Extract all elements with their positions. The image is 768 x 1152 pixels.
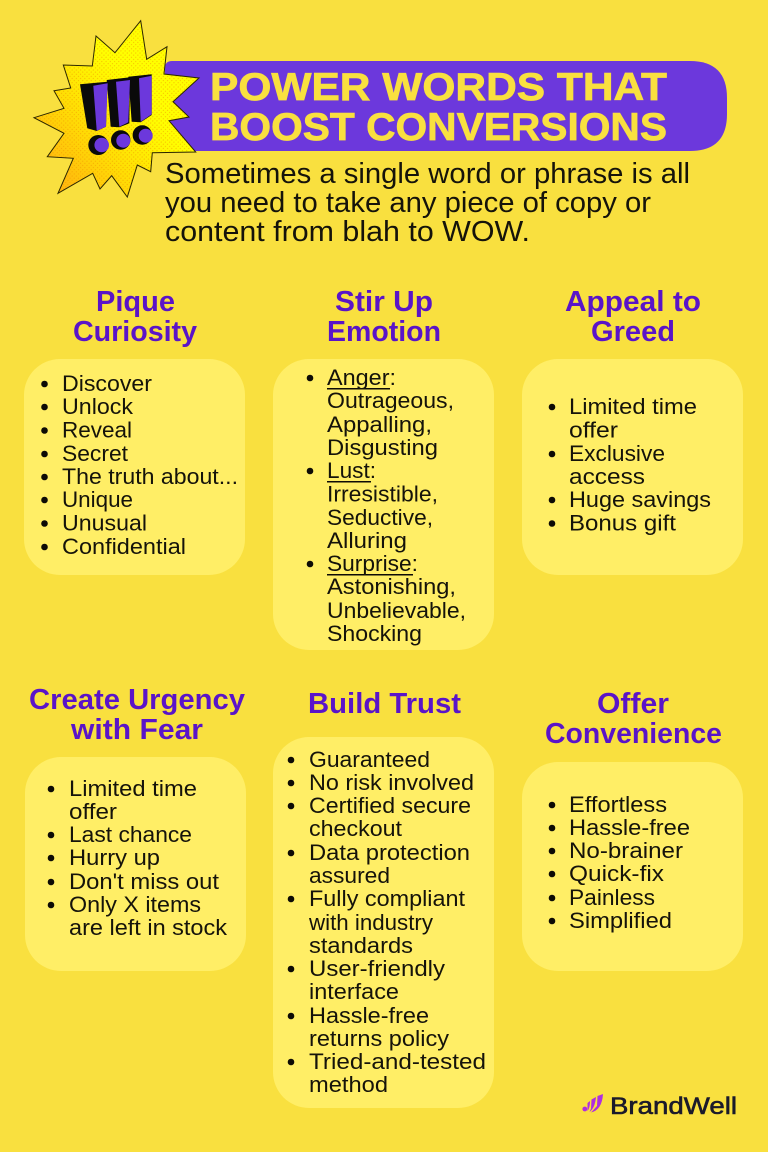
heading: Stir Up Emotion: Emotion: [327, 316, 441, 348]
heading: Offer Convenience: [545, 688, 722, 750]
bullet list: Discover: [62, 371, 153, 396]
bullet list: [41, 371, 238, 559]
intro text: [165, 158, 690, 248]
card background: [273, 359, 494, 650]
bullet list: Lust:: [327, 458, 376, 483]
bullet list: [307, 365, 466, 646]
bullet list: Guaranteed: [309, 747, 430, 772]
heading: Stir Up Emotion: Stir Up: [335, 286, 433, 318]
bullet list: checkout: [309, 816, 403, 841]
card background: [522, 762, 743, 971]
bullet list: Unusual: [62, 510, 147, 536]
bullet list: are left in stock: [69, 915, 228, 940]
title: BOOST CONVERSIONS: [210, 106, 667, 149]
heading: Create Urgency with Fear: Create Urgency: [29, 684, 245, 716]
bullet list: Hurry up: [69, 845, 160, 870]
bullet list: standards: [309, 933, 413, 958]
heading: Pique Curiosity: Pique: [96, 286, 175, 318]
bullet list: Reveal: [62, 418, 132, 442]
bullet list: offer: [69, 799, 118, 824]
intro text: Sometimes a single word or phrase is all: [165, 158, 690, 190]
heading: Pique Curiosity: [73, 286, 197, 348]
intro text: content from blah to WOW.: [165, 216, 530, 248]
panel: Stir Up Emotion: [273, 286, 494, 650]
bullet list: Seductive,: [327, 505, 433, 530]
heading: Stir Up Emotion: [327, 286, 441, 348]
heading: Offer Convenience: Convenience: [545, 718, 722, 750]
title banner: [165, 61, 727, 151]
bullet list: [48, 776, 228, 940]
bullet list: Confidential: [62, 534, 186, 559]
bullet list: User-friendly: [309, 956, 446, 981]
bullet list: returns policy: [309, 1026, 450, 1051]
panel: Appeal to Greed: [522, 286, 743, 575]
title: POWER WORDS THAT: [210, 66, 668, 109]
bullet list: Surprise:: [327, 551, 418, 576]
bullet list: Shocking: [327, 621, 422, 646]
bullet list: Hassle-free: [309, 1003, 429, 1028]
bullet list: Astonishing,: [327, 574, 456, 599]
bullet list: Only X items: [69, 892, 201, 917]
bullet list: access: [569, 464, 645, 489]
bullet list: Huge savings: [569, 487, 711, 512]
panel: Create Urgency with Fear: [25, 684, 246, 971]
bullet list: Secret: [62, 441, 129, 466]
title: [210, 66, 668, 149]
heading: Offer Convenience: Offer: [597, 688, 669, 720]
bullet list: No-brainer: [569, 838, 684, 863]
bullet list: Unbelievable,: [327, 598, 466, 623]
bullet list: Hassle-free: [569, 815, 690, 840]
panel: Offer Convenience: [522, 688, 743, 971]
bullet list: interface: [309, 979, 399, 1004]
panel: Pique Curiosity: [24, 286, 245, 575]
bullet list: Limited time: [569, 394, 697, 419]
bullet list: Last chance: [69, 822, 192, 847]
bullet list: Irresistible,: [327, 482, 438, 506]
bullet list: with industry: [308, 910, 434, 935]
bullet list: Limited time: [69, 776, 197, 801]
bullet list: offer: [569, 418, 619, 442]
bullet list: Alluring: [327, 528, 407, 553]
bullet list: No risk involved: [309, 770, 474, 795]
bullet list: Fully compliant: [309, 886, 466, 911]
bullet list: Effortless: [569, 792, 667, 817]
bullet list: Quick-fix: [569, 861, 665, 886]
bullet list: Simplified: [569, 908, 672, 933]
bullet list: Unlock: [62, 394, 134, 419]
icon: starburst with exclamation marks: [34, 21, 199, 197]
bullet list: The truth about...: [62, 464, 238, 489]
bullet list: Data protection: [309, 840, 470, 865]
bullet list: Unique: [62, 487, 133, 512]
bullet list: Outrageous,: [327, 388, 454, 413]
bullet list: Exclusive: [569, 441, 665, 466]
bullet list: assured: [309, 863, 390, 888]
bullet list: Certified secure: [309, 793, 471, 818]
bullet list: [288, 747, 486, 1097]
card background: [273, 737, 494, 1108]
heading: Pique Curiosity: Curiosity: [73, 316, 197, 348]
card background: [25, 757, 246, 971]
logo: BrandWell: [582, 1093, 737, 1120]
bullet list: Bonus gift: [569, 510, 677, 536]
heading: Create Urgency with Fear: with Fear: [70, 714, 203, 746]
bullet list: method: [309, 1072, 388, 1097]
heading: Create Urgency with Fear: [29, 684, 245, 746]
bullet list: Anger:: [327, 365, 396, 390]
wordmark: BrandWell: [610, 1093, 737, 1120]
card background: [24, 359, 245, 575]
bullet list: Disgusting: [327, 435, 438, 460]
icon: BrandWell mark: [582, 1094, 603, 1112]
bullet list: [549, 792, 690, 933]
heading: Build Trust: Build Trust: [308, 688, 461, 720]
bullet list: Painless: [569, 885, 655, 910]
bullet list: Tried-and-tested: [309, 1049, 486, 1074]
panel: Build Trust: [273, 688, 494, 1108]
heading: Appeal to Greed: Greed: [591, 316, 675, 348]
intro text: you need to take any piece of copy or: [165, 187, 652, 219]
bullet list: Appalling,: [327, 412, 432, 437]
card background: [522, 359, 743, 575]
heading: Appeal to Greed: [565, 286, 701, 348]
bullet list: Don't miss out: [69, 869, 220, 894]
bullet list: [549, 394, 711, 536]
heading: Appeal to Greed: Appeal to: [565, 286, 701, 318]
